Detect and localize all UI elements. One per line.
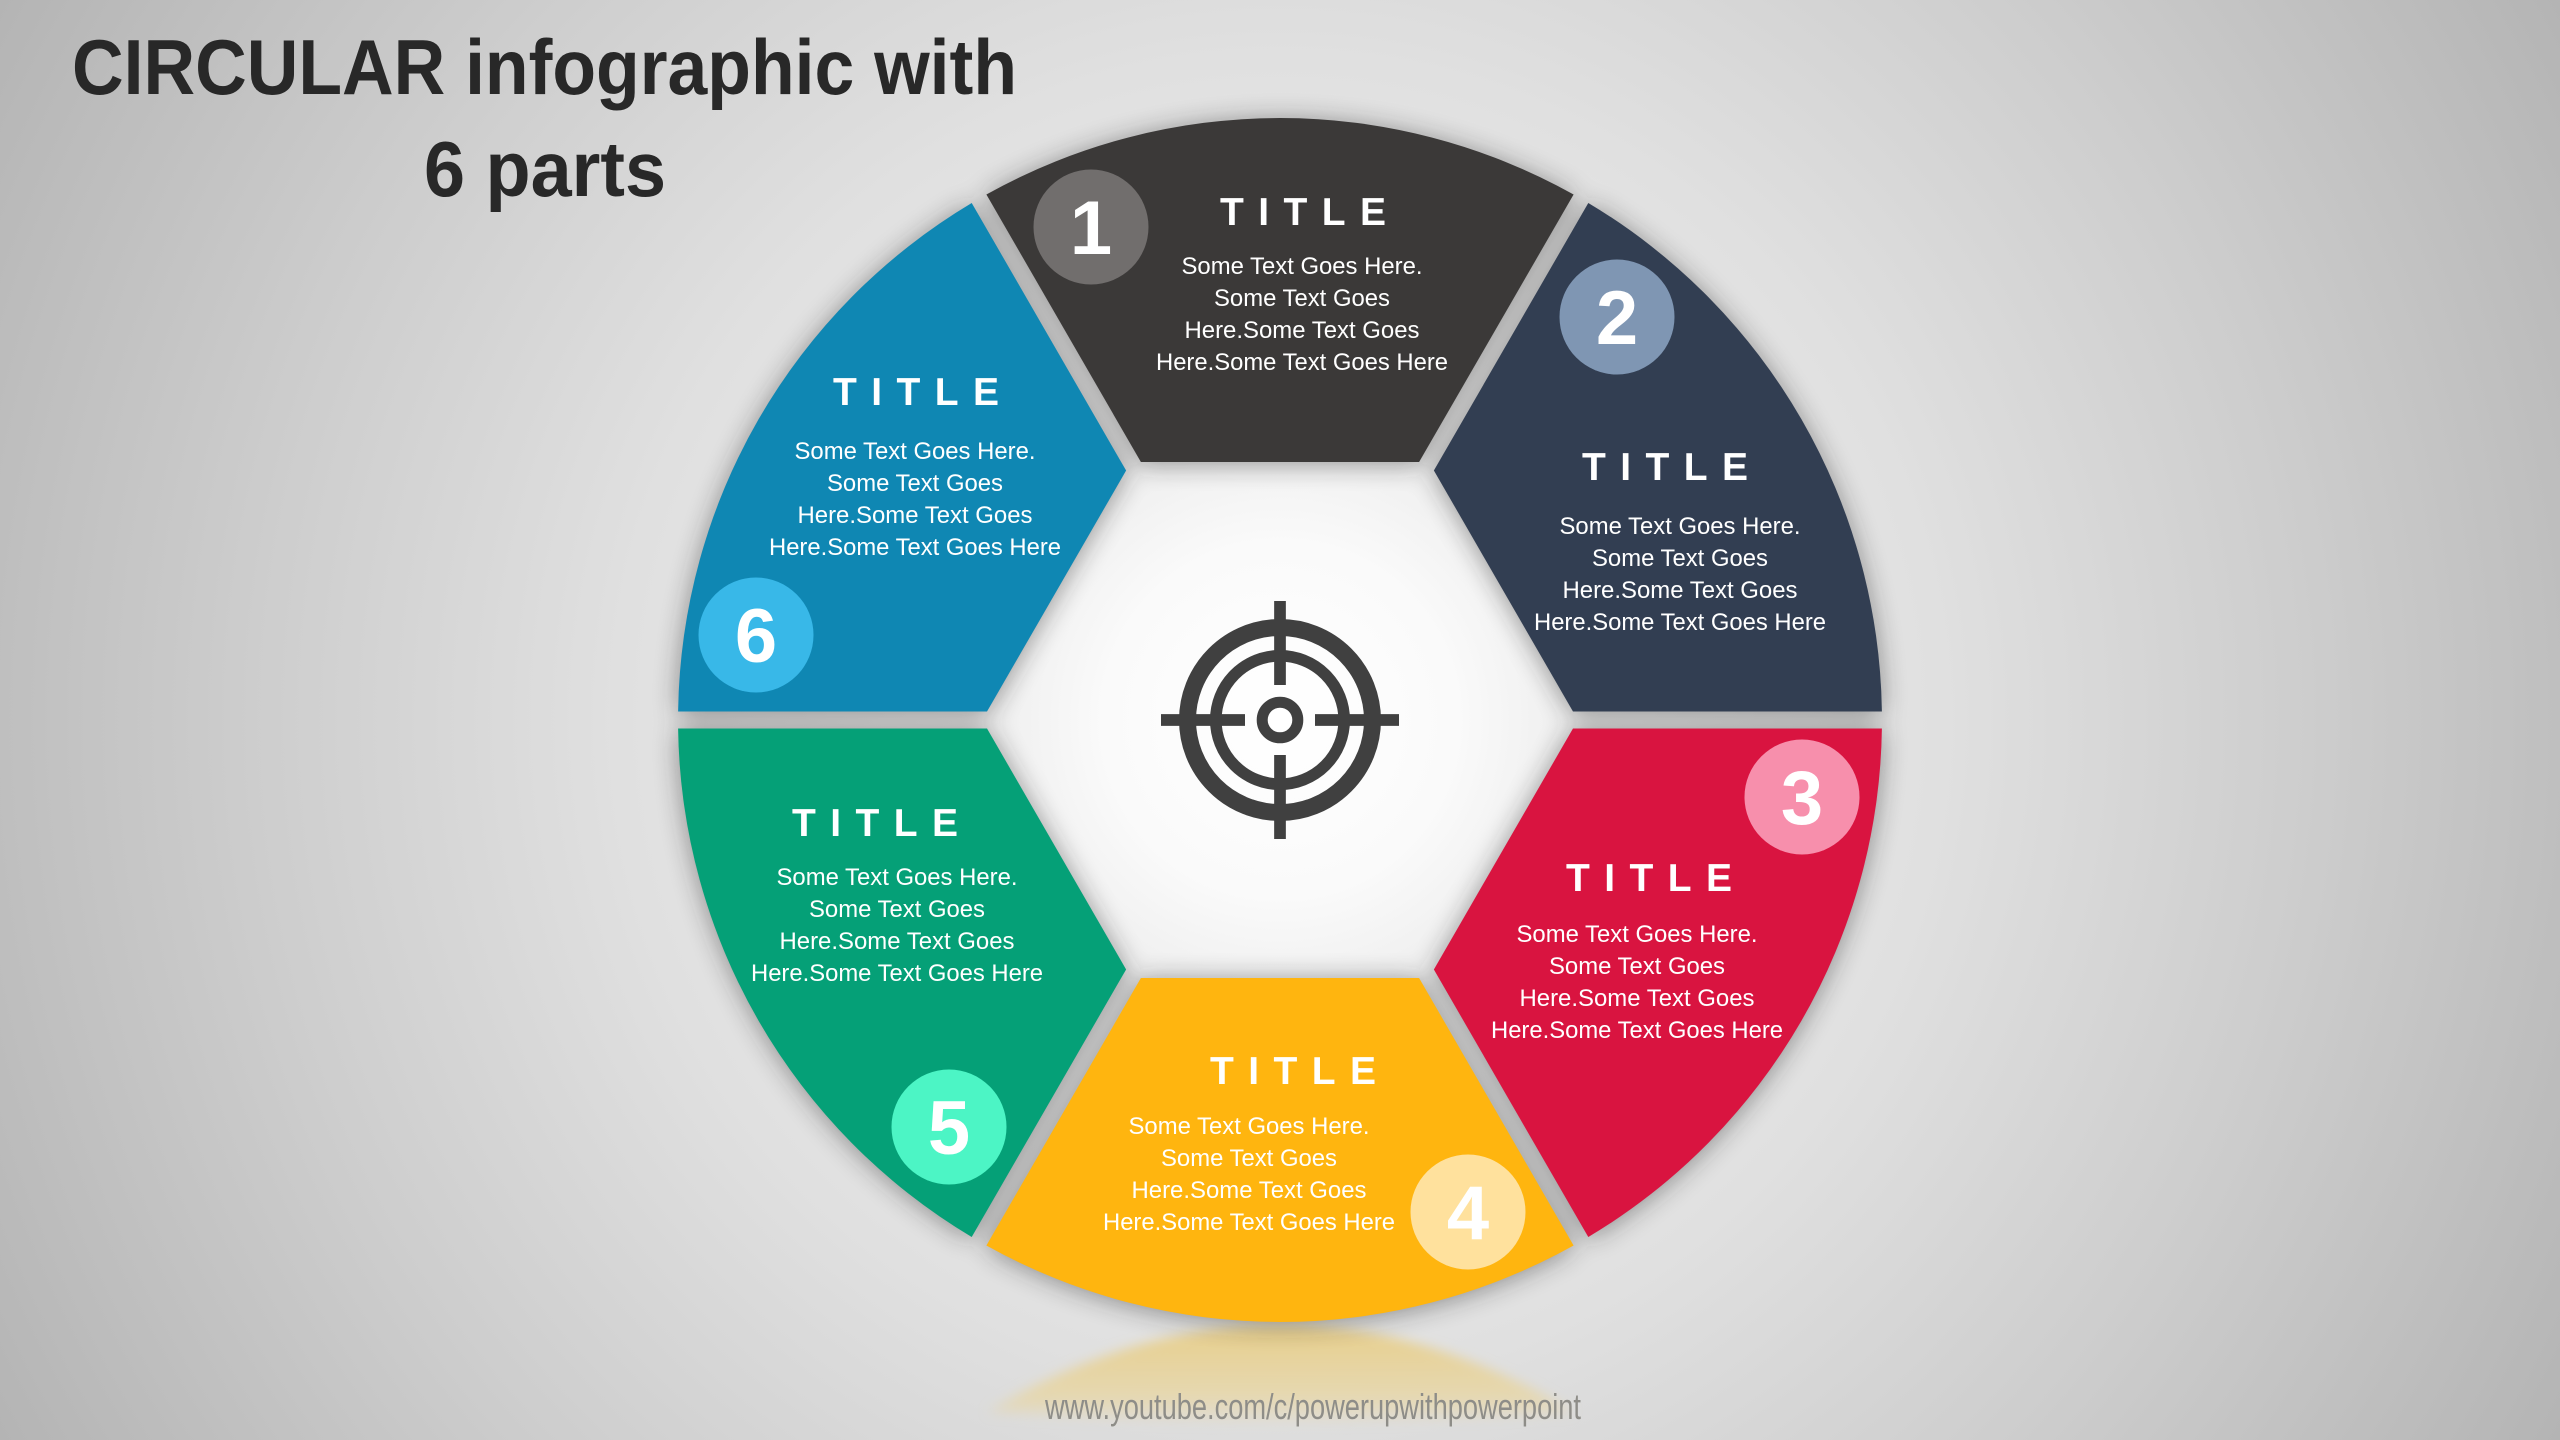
body text 3: Some Text Goes Here. — [1516, 921, 1758, 948]
wedge 3 — [1357, 595, 1948, 1275]
body text 6: Some Text Goes — [827, 470, 1003, 497]
body text 5: Here.Some Text Goes — [780, 928, 1014, 955]
panel: segment 6 — [612, 165, 1203, 845]
body text 5: Some Text Goes Here. — [776, 864, 1018, 891]
main title: CIRCULAR infographic with — [72, 23, 1017, 111]
badge 1 — [1034, 170, 1148, 284]
badge 5: 5 — [928, 1086, 970, 1171]
title 2: TITLE — [1582, 446, 1748, 489]
body text 1: Here.Some Text Goes Here — [1156, 349, 1448, 376]
panel: segment 5 — [612, 595, 1203, 1275]
body text 1 — [1156, 253, 1448, 376]
body text 3 — [1491, 921, 1783, 1044]
body text 5: Here.Some Text Goes Here — [751, 960, 1043, 987]
body text 4: Some Text Goes Here. — [1128, 1113, 1370, 1140]
body text 5: Some Text Goes — [809, 896, 985, 923]
panel: segment 3 — [1357, 595, 1948, 1275]
badge 2 — [1560, 260, 1674, 374]
body text 2: Some Text Goes Here. — [1560, 513, 1800, 540]
body text 6: Here.Some Text Goes — [798, 502, 1032, 529]
body text 2: Here.Some Text Goes — [1562, 577, 1798, 604]
body text 1: Some Text Goes Here. — [1182, 253, 1422, 280]
body text 3: Here.Some Text Goes Here — [1491, 1017, 1783, 1044]
icon: target crosshair — [1161, 601, 1399, 839]
title 6: TITLE — [833, 371, 999, 414]
main title — [72, 23, 1017, 213]
panel: segment 1 — [986, 118, 1574, 462]
wheel shadow — [612, 120, 1948, 1324]
body text 4: Here.Some Text Goes Here — [1103, 1209, 1395, 1236]
wedge 1 — [986, 118, 1574, 462]
badge 6: 6 — [735, 594, 777, 679]
wedge 4 — [986, 978, 1574, 1322]
body text 6: Some Text Goes Here. — [794, 438, 1036, 465]
body text 6 — [769, 438, 1061, 561]
badge 3 — [1744, 740, 1860, 854]
title 4: TITLE — [1210, 1050, 1376, 1093]
footer url: www.youtube.com/c/powerupwithpowerpoint — [1044, 1386, 1581, 1427]
reflection of wheel — [987, 1325, 1574, 1422]
body text 2: Here.Some Text Goes Here — [1534, 609, 1826, 636]
badge 4: 4 — [1447, 1171, 1489, 1256]
body text 2 — [1534, 513, 1826, 636]
badge 5 — [892, 1070, 1006, 1184]
title 3: TITLE — [1566, 857, 1732, 900]
main title: 6 parts — [424, 125, 666, 213]
panel: segment 4 — [986, 978, 1574, 1322]
panel: segment 2 — [1357, 165, 1948, 845]
body text 6: Here.Some Text Goes Here — [769, 534, 1061, 561]
body text 3: Here.Some Text Goes — [1520, 985, 1754, 1012]
badge 3: 3 — [1781, 756, 1823, 841]
badge 6 — [698, 578, 814, 692]
wedge 2 — [1357, 165, 1948, 845]
title 5: TITLE — [792, 802, 958, 845]
badge 4 — [1410, 1154, 1526, 1270]
body text 3: Some Text Goes — [1549, 953, 1725, 980]
badge 1: 1 — [1070, 186, 1112, 271]
title 1: TITLE — [1220, 191, 1386, 234]
body text 4: Some Text Goes — [1161, 1145, 1337, 1172]
body text 5 — [751, 864, 1043, 987]
body text 1: Some Text Goes — [1214, 285, 1390, 312]
wedge 6 — [612, 165, 1203, 845]
body text 1: Here.Some Text Goes — [1184, 317, 1420, 344]
wedge 5 — [612, 595, 1203, 1275]
body text 4 — [1103, 1113, 1395, 1236]
body text 4: Here.Some Text Goes — [1132, 1177, 1366, 1204]
badge 2: 2 — [1596, 276, 1638, 361]
body text 2: Some Text Goes — [1592, 545, 1768, 572]
